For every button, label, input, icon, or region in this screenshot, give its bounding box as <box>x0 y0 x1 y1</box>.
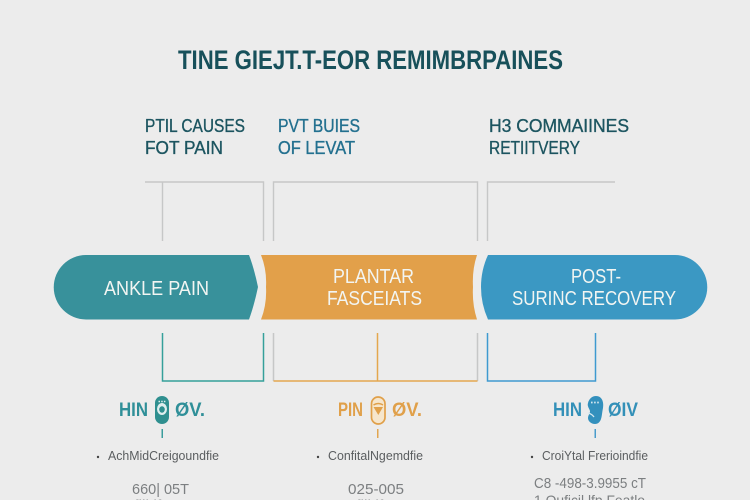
column: plantar fasciitis details: ConfitalNgemdfie <box>328 449 423 463</box>
lower connector brackets <box>162 333 596 381</box>
column: recovery details: C8 -498-3.9955 cT <box>534 475 646 492</box>
column: recovery details <box>531 396 648 500</box>
heading: recovery <box>489 116 629 158</box>
icon: teal foot <box>155 396 169 424</box>
heading: causes <box>145 116 245 158</box>
heading: recovery: H3 COMMAIINES <box>489 116 629 136</box>
band segment: plantar fasciitis: PLANTAR <box>333 266 414 288</box>
column: ankle pain details <box>97 396 219 500</box>
band segment: ankle pain <box>54 255 258 320</box>
band segment: plantar fasciitis <box>261 255 477 320</box>
heading: recovery: RETIITVERY <box>489 138 580 158</box>
column: ankle pain details: HIN <box>119 400 148 421</box>
column: ankle pain details: 660| 05T <box>132 481 189 498</box>
column: recovery details: ØIV <box>608 400 638 421</box>
upper connector brackets <box>145 182 615 241</box>
column: recovery details: HIN <box>553 400 582 421</box>
column: plantar fasciitis details: ØV. <box>392 400 422 421</box>
column: plantar fasciitis details: PIN <box>338 400 363 421</box>
heading: causes: PTIL CAUSES <box>145 116 245 136</box>
column: ankle pain details: ØV. <box>175 400 205 421</box>
heading: levels <box>278 116 360 158</box>
heading: causes: FOT PAIN <box>145 138 223 158</box>
icon: orange foot <box>372 397 385 424</box>
icon: blue foot <box>588 396 603 424</box>
band segment: post-surgical recovery: SURINC RECOVERY <box>512 288 676 310</box>
heading: levels: OF LEVAT <box>278 138 355 158</box>
band segment: post-surgical recovery <box>481 255 707 320</box>
column: ankle pain details: AchMidCreigoundfie <box>108 449 219 463</box>
title: TINE GIEJT.T-EOR REMIMBRPAINES <box>178 45 563 75</box>
band segment: ankle pain: ANKLE PAIN <box>104 278 209 300</box>
column: plantar fasciitis details <box>317 397 423 500</box>
band segment: post-surgical recovery: POST- <box>571 266 621 288</box>
band segment: plantar fasciitis: FASCEIATS <box>327 288 422 310</box>
column: recovery details: CroiYtal Frerioindfie <box>542 449 648 463</box>
column: plantar fasciitis details: 025-005 <box>348 481 404 498</box>
heading: levels: PVT BUIES <box>278 116 360 136</box>
